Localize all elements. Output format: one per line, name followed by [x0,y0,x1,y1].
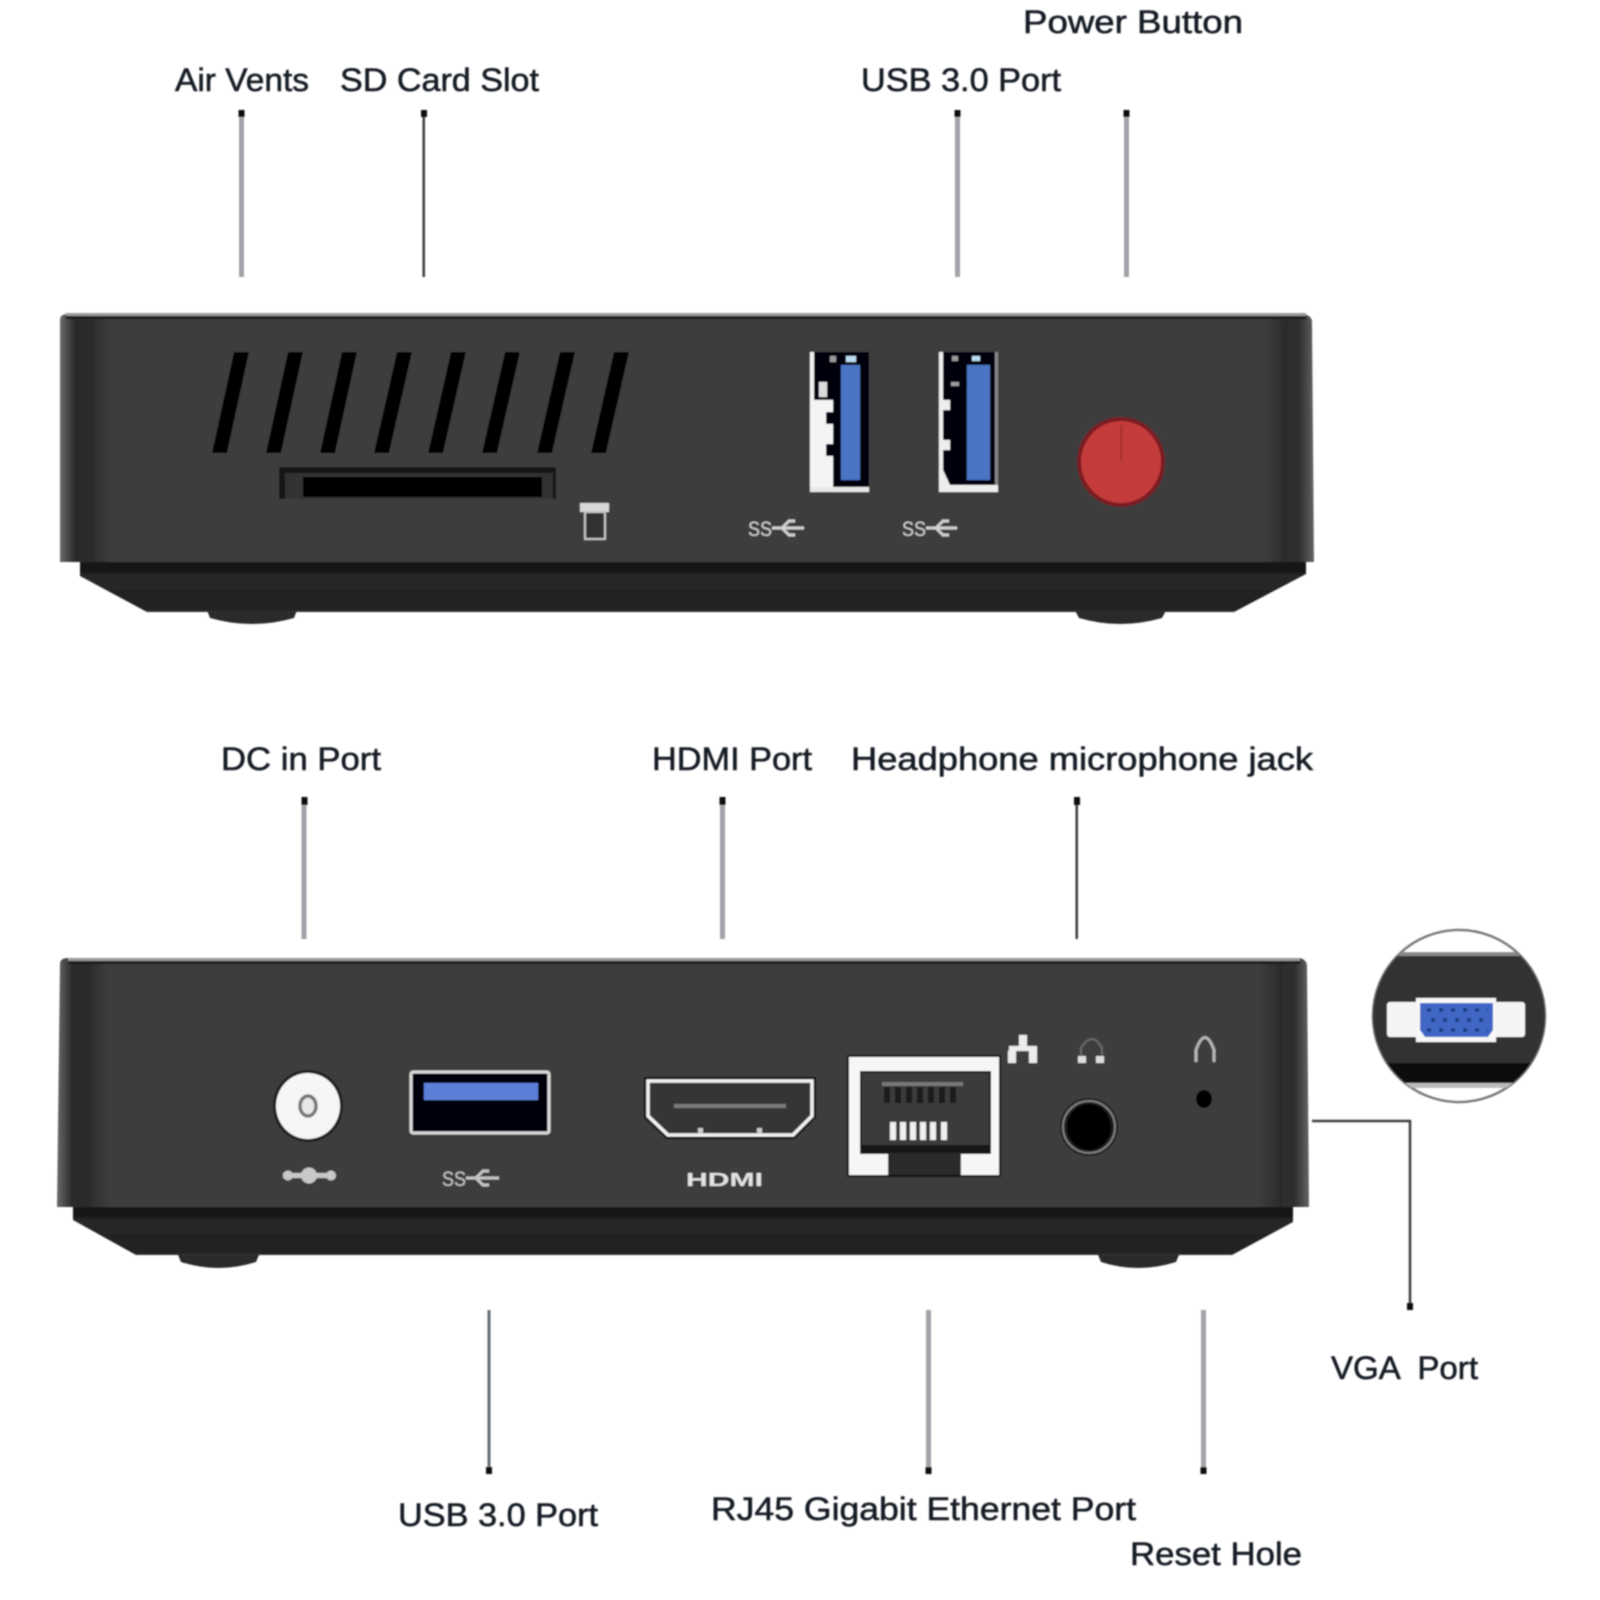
pointer: USB 3.0 top [954,110,960,277]
reset hole [1196,1090,1212,1108]
icon: SS USB rear: SS [442,1168,466,1191]
heading: RJ45 Gigabit Ethernet Port: RJ45 Gigabit Ethernet Port [711,1491,1136,1527]
heading: DC in Port: DC in Port [221,741,381,777]
USB 3.0 port rear [411,1072,549,1133]
power button [1077,417,1165,507]
headphone microphone jack [1060,1098,1118,1156]
pointer: USB 3.0 bottom [486,1310,492,1474]
icon: DC polarity [283,1168,336,1184]
inset: VGA port detail [1370,930,1550,1102]
panel: top device front view [60,313,1314,624]
icon: HDMI logo text: HDMI [686,1170,763,1190]
pointer: RJ45 [926,1310,932,1474]
heading: Headphone microphone jack: Headphone microphone jack [851,741,1314,777]
device base and feet [73,1205,1293,1268]
heading: HDMI Port: HDMI Port [652,741,812,777]
heading: Reset Hole: Reset Hole [1130,1536,1302,1572]
HDMI port [648,1081,812,1135]
heading: USB 3.0 Port top: USB 3.0 Port [861,62,1061,98]
pointer: DC in [302,797,308,939]
icon: SS USB 1 [748,518,804,541]
heading: SD Card Slot: SD Card Slot [340,62,539,98]
connector line to VGA inset [1312,1121,1410,1305]
pointer: air vents [238,110,244,277]
icon: SS USB 2: SS [902,518,926,541]
icon: reset [1196,1038,1214,1062]
USB 3.0 port 2 [939,352,998,492]
device base and feet [80,560,1306,624]
pointer: headphone jack [1074,797,1080,939]
device body [57,958,1309,1207]
device body [60,313,1314,562]
DC in jack [273,1070,343,1142]
icon: SD card [580,503,609,539]
panel: bottom device rear view [57,958,1309,1268]
icon: headphone [1078,1039,1104,1063]
icon: SS USB 2 [902,518,957,541]
SD card slot [279,467,556,499]
icon: SS USB rear [442,1168,499,1191]
icon: SS USB 1: SS [748,518,772,541]
pointer: SD card slot [421,110,427,277]
RJ45 ethernet port [847,1055,1001,1177]
pointer: VGA end dot [1407,1303,1413,1310]
icon: network [1008,1035,1037,1063]
heading: Power Button: Power Button [1023,4,1243,40]
pointer: power button [1124,110,1130,277]
pointer: reset [1200,1310,1206,1474]
air vents [212,352,629,453]
USB 3.0 port 1 [810,352,869,492]
heading: USB 3.0 Port bottom: USB 3.0 Port [398,1497,598,1533]
heading: Air Vents: Air Vents [175,62,309,98]
heading: VGA Port: VGA Port [1331,1350,1478,1386]
pointer: HDMI [720,797,726,939]
